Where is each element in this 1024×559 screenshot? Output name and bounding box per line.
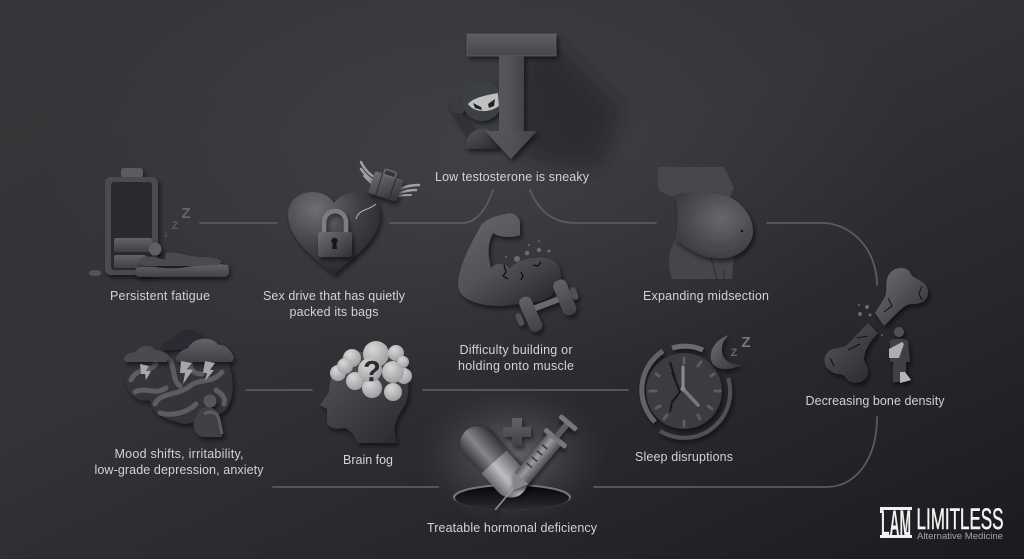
ninja [447,81,502,149]
dumbbell [514,278,579,334]
sleeping figure on mattress [135,242,229,277]
label: treatable: Treatable hormonal deficiency [427,521,598,535]
logo: Limitless Alternative Medicine: LAM [881,503,911,544]
icon: locked heart with winged suitcase [288,162,419,275]
clock ticks [650,358,720,426]
letter T [467,34,556,159]
icon: fractured bone and injured figure [825,268,928,383]
zzz: z [164,230,168,239]
label: bone density: Decreasing bone density [806,394,945,408]
tagline: Alternative Medicine [917,531,1003,542]
label: brain fog: Brain fog [343,453,393,467]
hips [669,238,734,279]
icon: head with brain fog cloud [320,341,412,443]
icon: cracked bicep and dumbbell [458,213,579,334]
label: muscle: Difficulty building or [460,343,572,357]
connector lines [200,190,877,487]
syringe [484,412,581,519]
logo: Limitless Alternative Medicine [880,503,1004,544]
lightning bolts [140,361,215,384]
zzz [164,205,191,239]
icon: battery and sleeper [89,168,229,277]
figure with sling and cast [889,327,911,383]
chest [658,167,734,200]
clock hands [680,367,698,405]
label: mood [94,447,264,477]
debris [858,304,883,336]
curled figure [194,394,222,437]
moon [711,335,744,369]
label: sleep: Sleep disruptions [635,450,733,464]
label: muscle [458,343,574,373]
medical cross [503,418,531,446]
debris [505,240,550,262]
label: sex drive: Sex drive that has quietly [263,289,406,303]
icon: expanding belly torso [658,167,753,279]
zzz: Z [172,220,179,232]
label: low testosterone: Low testosterone is sneaky [435,170,590,184]
padlock [318,211,352,257]
zzz: Z [181,205,191,222]
label: fatigue: Persistent fatigue [110,289,210,303]
zz: Z [741,334,751,351]
fog puffs [330,341,412,401]
winged suitcase [361,162,419,202]
icon: pill and syringe over hole [417,385,607,525]
zz: Z [731,347,738,359]
zz [731,334,751,359]
label: muscle: holding onto muscle [458,359,574,373]
label: sex drive: packed its bags [290,305,378,319]
brain folds [131,360,225,414]
icon: cracked clock and moon [642,334,751,438]
icon: storm brain with curled figure [124,330,234,437]
icon: T with down arrow and ninja [447,34,622,170]
clock [642,346,730,438]
label: mood: Mood shifts, irritability, [114,447,244,461]
battery [105,168,158,275]
capsule [453,419,535,505]
storm clouds [124,330,234,362]
icon: head with brain fog cloud: ? [363,356,381,388]
label: mood: low-grade depression, anxiety [94,463,264,477]
label: sex drive [263,289,406,319]
label: midsection: Expanding midsection [643,289,769,303]
belly [674,192,753,258]
